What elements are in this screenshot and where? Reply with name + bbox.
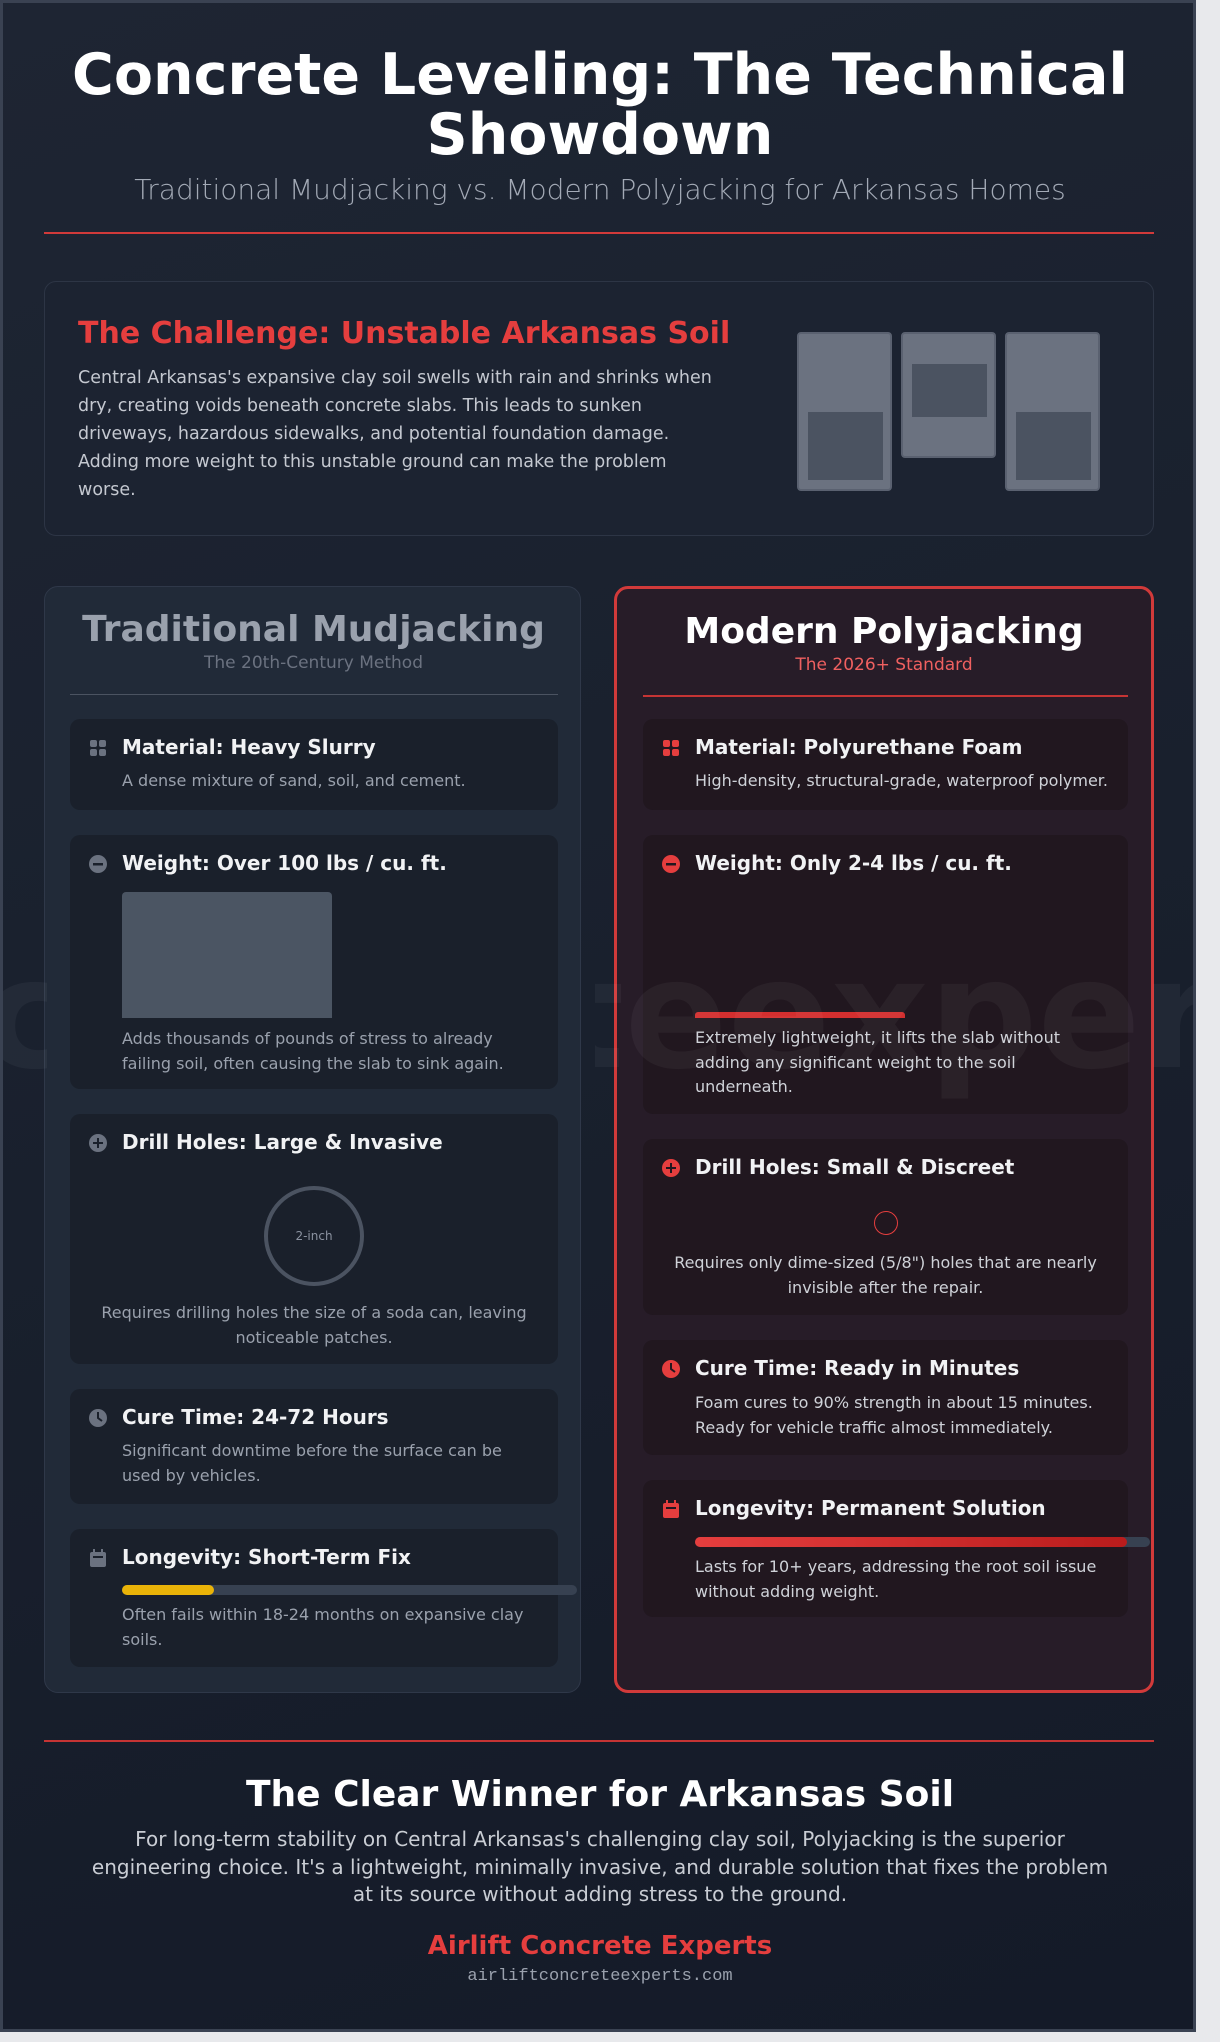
icon: plus [89,1134,107,1152]
card: longevity: Longevity: Permanent Solution [695,1496,1046,1520]
brand: Airlift Concrete Experts [428,1931,772,1961]
card: weight: Weight: Over 100 lbs / cu. ft. [122,851,447,875]
card: longevity: Often fails within 18-24 months on expansive clay soils. [122,1605,523,1648]
title: Showdown [427,102,773,168]
card: drill holes: Requires only dime-sized (5/8") holes that are nearly invisible after the repair. [674,1253,1097,1296]
card: drill holes [70,1114,558,1364]
panel: modern polyjacking [614,586,1154,1693]
icon: minus [662,855,680,873]
challenge text: Central Arkansas's expansive clay soil swells with rain and shrinks when dry, creating voids beneath concrete slabs. This leads to sunken driveways, hazardous sidewalks, and potential foundation damage. Adding more weight to this unstable ground can make the problem worse. [78,368,712,500]
subheading: The 2026+ Standard [795,655,973,675]
card: drill holes [643,1139,1128,1315]
card: cure time [70,1389,558,1504]
thin foam line [695,1012,905,1018]
card: cure time: Foam cures to 90% strength in about 15 minutes. Ready for vehicle traffic almost immediately. [695,1393,1093,1436]
card: weight [70,835,558,1089]
icon: grid [90,740,106,756]
icon: calendar [90,1549,106,1567]
card: material: High-density, structural-grade, waterproof polymer. [695,771,1108,790]
icon: clock [89,1409,107,1427]
icon: slabs illustration [797,332,1100,491]
subtitle: Traditional Mudjacking vs. Modern Polyjacking for Arkansas Homes [134,173,1066,206]
card: material: Material: Polyurethane Foam [695,735,1022,759]
card: material: Material: Heavy Slurry [122,735,376,759]
card: cure time: Cure Time: Ready in Minutes [695,1356,1019,1380]
card: material [70,719,558,810]
icon: minus [89,855,107,873]
card: cure time [643,1340,1128,1455]
url: airliftconcreteexperts.com [467,1967,733,1986]
heading: Modern Polyjacking [684,611,1084,652]
bar [695,1537,1150,1547]
card: material [643,719,1128,810]
card: cure time: Cure Time: 24-72 Hours [122,1405,389,1429]
footer heading: The Clear Winner for Arkansas Soil [246,1774,954,1815]
card: drill holes: Requires drilling holes the size of a soda can, leaving noticeable patches. [101,1303,527,1346]
icon: calendar [663,1500,679,1518]
heading: Traditional Mudjacking [82,609,545,650]
card: weight: Weight: Only 2-4 lbs / cu. ft. [695,851,1012,875]
card: drill holes: Drill Holes: Small & Discreet [695,1155,1014,1179]
icon: clock [662,1360,680,1378]
title: Concrete Leveling: The Technical [72,42,1128,108]
card: cure time: Significant downtime before the surface can be used by vehicles. [122,1441,502,1484]
icon: plus [662,1159,680,1177]
panel: traditional mudjacking [44,586,581,1693]
panel: challenge [44,281,1154,536]
challenge heading: The Challenge: Unstable Arkansas Soil [78,316,730,351]
icon: grid [663,740,679,756]
card: material: A dense mixture of sand, soil, and cement. [122,771,466,790]
card: weight: Extremely lightweight, it lifts the slab without adding any significant weight to the soil underneath. [695,1028,1060,1096]
card: longevity [643,1480,1128,1617]
title [72,42,1128,168]
card: longevity: Lasts for 10+ years, addressing the root soil issue without adding weight. [695,1557,1096,1600]
card: longevity: Longevity: Short-Term Fix [122,1545,411,1569]
subheading: The 20th-Century Method [204,653,423,673]
footer text: For long-term stability on Central Arkansas's challenging clay soil, Polyjacking is the superior engineering choice. It's a lightweight, minimally invasive, and durable solution that fixes the problem at its source without adding stress to the ground. [92,1827,1108,1906]
card: longevity [70,1529,558,1667]
card: weight [643,835,1128,1114]
2-inch circle [264,1186,364,1286]
heavy block [122,892,332,1018]
card: drill holes: Drill Holes: Large & Invasive [122,1130,443,1154]
small circle [874,1211,898,1235]
bar [122,1585,577,1595]
card: weight: Adds thousands of pounds of stress to already failing soil, often causing the slab to sink again. [122,1029,504,1072]
2-inch circle: 2-inch [295,1229,333,1243]
